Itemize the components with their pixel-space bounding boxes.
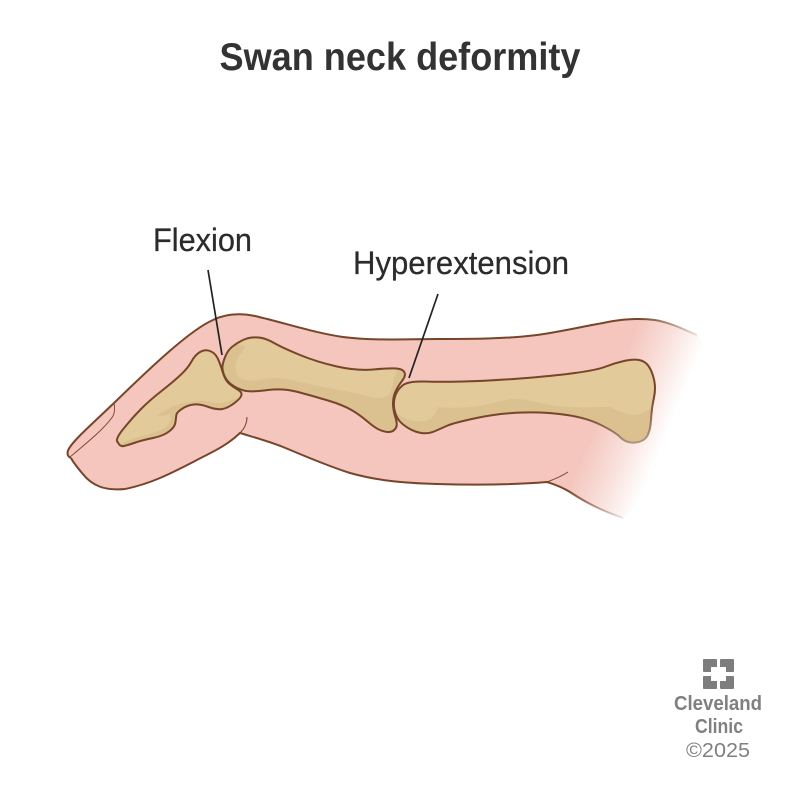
Cleveland Clinic logo and copyright: Clinic bbox=[695, 716, 743, 738]
label: Flexion: Flexion bbox=[153, 222, 252, 258]
fingernail bbox=[70, 403, 115, 457]
icon: Cleveland Clinic cross mark bbox=[703, 659, 734, 689]
illustration: finger with swan neck deformity bbox=[68, 314, 760, 518]
Cleveland Clinic logo and copyright bbox=[674, 659, 762, 762]
middle phalanx bone bbox=[222, 336, 406, 433]
proximal phalanx bone bbox=[390, 360, 660, 450]
infographic canvas bbox=[66, 42, 761, 757]
logo wordmark: Cleveland bbox=[674, 693, 762, 715]
copyright year: ©2025 bbox=[686, 740, 750, 762]
knuckle and palm creases bbox=[240, 417, 568, 482]
distal phalanx bone bbox=[116, 349, 242, 448]
skin outline bbox=[68, 314, 697, 518]
leader line: Flexion bbox=[208, 270, 222, 355]
label: Flexion bbox=[153, 222, 252, 355]
label: Hyperextension bbox=[353, 245, 569, 378]
label: Hyperextension: Hyperextension bbox=[353, 245, 569, 281]
title: Swan neck deformity bbox=[220, 36, 581, 79]
skin of finger bbox=[68, 314, 760, 518]
leader line: Hyperextension bbox=[409, 294, 438, 378]
